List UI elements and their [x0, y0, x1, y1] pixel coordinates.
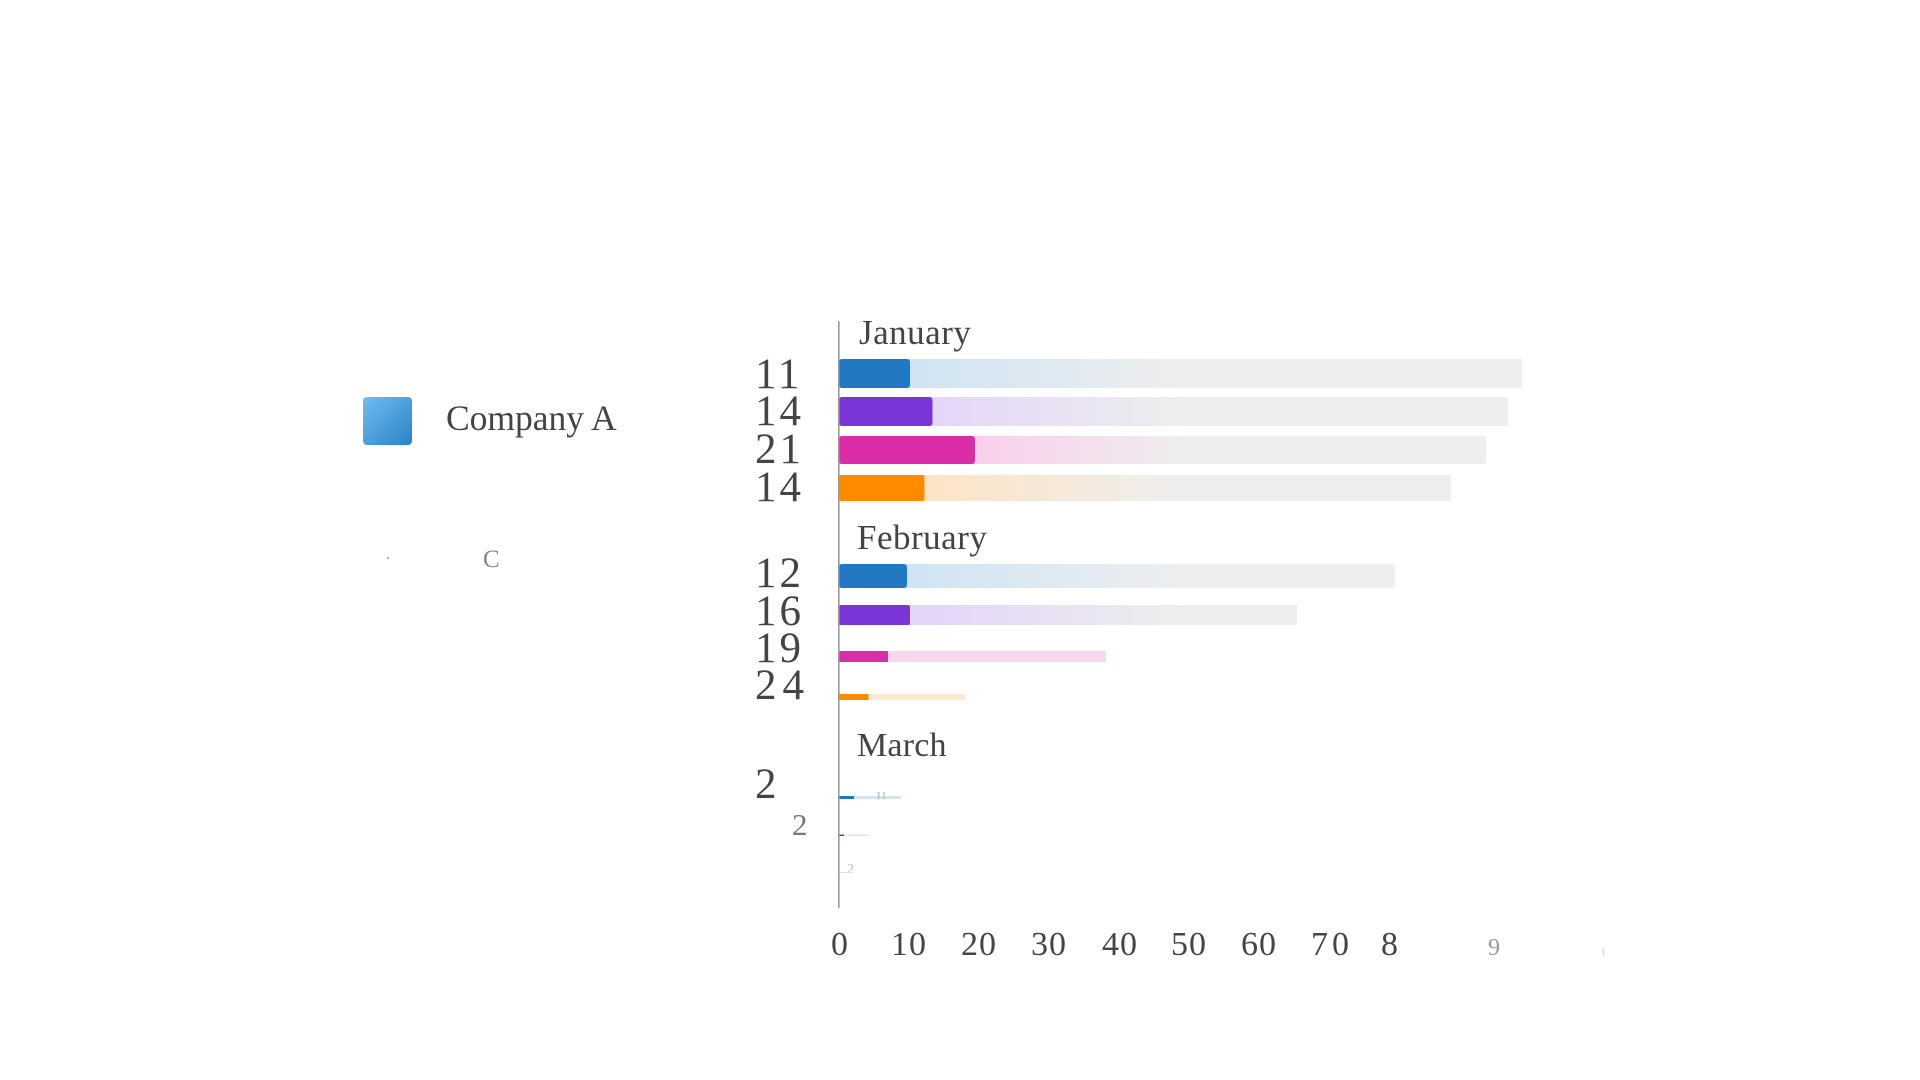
row: February Company C: 19: [755, 625, 804, 672]
row: January Company A: 11: [755, 351, 802, 398]
heading: January: January: [859, 313, 971, 352]
horizontal axis labels: 40: [1102, 926, 1138, 963]
legend: [363, 397, 617, 573]
row: February Company C: [755, 625, 1106, 672]
legend swatch: Company A: [363, 397, 412, 445]
row: February Company A: [755, 550, 1395, 597]
row: January Company A: [755, 351, 1522, 398]
row: February Company B: [755, 588, 1297, 635]
row: March Company B: [792, 807, 869, 842]
row: January Company B: [755, 388, 1508, 435]
heading: February: February: [857, 518, 987, 557]
horizontal axis labels: 1: [1601, 947, 1606, 957]
January group: [755, 313, 1522, 511]
row: February Company D: 24: [755, 662, 810, 709]
horizontal axis labels: 8: [1381, 926, 1399, 963]
vertical axis line: [838, 321, 840, 908]
row: February Company B: 16: [755, 588, 804, 635]
row: January Company D: 14: [755, 464, 804, 511]
heading: March: March: [857, 727, 947, 764]
legend swatch fading in: [387, 557, 389, 559]
horizontal axis labels: 10: [891, 926, 927, 963]
horizontal axis labels: 0: [831, 926, 849, 963]
horizontal axis labels: 60: [1241, 926, 1277, 963]
legend label fading in: C: [483, 546, 500, 573]
horizontal axis labels: 70: [1311, 926, 1353, 963]
row: March Company A: [755, 761, 901, 808]
row: March Company B: 2: [792, 807, 808, 842]
February group: [755, 518, 1395, 709]
row: February Company A: 12: [755, 550, 804, 597]
row: January Company C: [755, 426, 1486, 473]
horizontal axis labels: 20: [961, 926, 997, 963]
horizontal axis labels: [831, 926, 1606, 963]
horizontal axis labels: 9: [1488, 935, 1500, 961]
row: January Company D: [755, 464, 1451, 511]
row: January Company C: 21: [755, 426, 804, 473]
row: March Company A: 2: [755, 761, 780, 808]
March group: [755, 727, 947, 877]
row: January Company B: 14: [755, 388, 804, 435]
horizontal axis labels: 30: [1031, 926, 1067, 963]
row: March Company C: 2: [847, 862, 854, 877]
horizontal axis labels: 50: [1171, 926, 1207, 963]
row: March Company C: [839, 862, 854, 877]
bar chart: [755, 313, 1606, 963]
row: March Company A: 11: [876, 790, 887, 802]
legend label: Company A: Company A: [446, 398, 617, 438]
row: February Company D: [755, 662, 965, 709]
